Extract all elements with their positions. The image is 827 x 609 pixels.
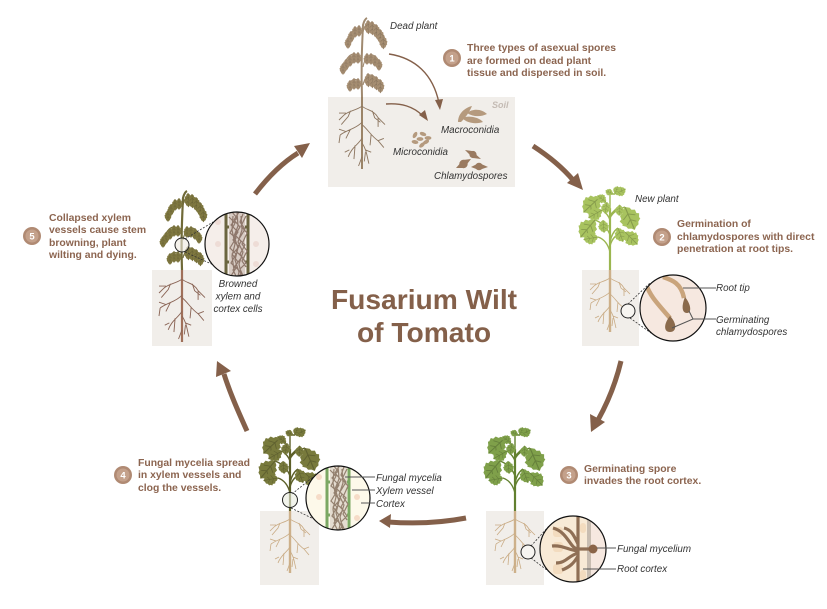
badge 2	[653, 228, 671, 246]
soil background 1	[328, 97, 515, 187]
step 3 text	[584, 464, 701, 487]
step 4 text: clog the vessels.	[138, 483, 221, 494]
microconidia label: Microconidia	[393, 147, 449, 158]
badge 1: 1	[449, 54, 455, 64]
badge 1	[443, 49, 461, 67]
zoom inset: root tip	[621, 275, 716, 341]
panel: step 1 dead plant and spores	[328, 18, 515, 187]
icon: microconidia	[411, 131, 431, 149]
germinating chlamydospores label: chlamydospores	[716, 327, 787, 338]
badge 3	[560, 466, 578, 484]
step 2 callout	[653, 219, 815, 255]
step 2 text: chlamydospores with direct	[677, 232, 815, 243]
arrow: step 3 to 4	[379, 514, 466, 528]
chlamydospores label: Chlamydospores	[434, 171, 508, 182]
step 5 text: wilting and dying.	[48, 250, 137, 261]
browned xylem label: xylem and	[215, 292, 261, 302]
badge 3: 3	[566, 470, 572, 482]
step 5 text: vessels cause stem	[49, 225, 146, 236]
olive plant	[253, 425, 324, 573]
soil background 2	[582, 270, 639, 346]
step 2 text	[677, 219, 815, 255]
macroconidia label: Macroconidia	[441, 125, 500, 136]
wilted plant	[159, 191, 208, 342]
zoom inset: fungal mycelia in xylem	[282, 465, 375, 533]
step 5 text: browning, plant	[49, 238, 127, 249]
step 1 text: are formed on dead plant	[467, 56, 592, 67]
panel: step 5 wilted plant	[152, 191, 269, 346]
step 2 text: Germination of	[677, 219, 751, 230]
step 5 text: Collapsed xylem	[49, 213, 131, 224]
step 3 text: Germinating spore	[584, 464, 677, 475]
arrow: step 5 to 1	[255, 143, 310, 194]
title: of Tomato	[357, 316, 491, 348]
badge 4: 4	[120, 470, 126, 482]
icon: macroconidia	[458, 106, 487, 123]
soil background 3	[486, 511, 544, 585]
arrow: dead plant to spores	[389, 54, 443, 110]
step 3 callout	[560, 464, 701, 487]
icon: chlamydospores	[456, 150, 488, 170]
fungal mycelia label: Fungal mycelia	[376, 473, 442, 484]
soil background 4	[260, 511, 319, 585]
soil label: Soil	[492, 100, 509, 110]
arrow: step 4 to 5	[216, 361, 247, 431]
step 1 text: tissue and dispersed in soil.	[467, 68, 606, 79]
panel: step 3 root cortex	[478, 425, 691, 585]
panel: step 4 xylem colonised	[253, 425, 442, 585]
cortex label: Cortex	[376, 499, 406, 510]
dead plant	[339, 18, 388, 169]
step 4 text	[138, 458, 250, 494]
step 4 text: in xylem vessels and	[138, 470, 241, 481]
soil background 5	[152, 270, 212, 346]
step 3 text: invades the root cortex.	[584, 476, 701, 487]
panel: step 2 new plant	[573, 184, 787, 346]
step 1 callout	[443, 43, 616, 79]
badge 5: 5	[29, 232, 35, 242]
arrow: step 2 to 3	[590, 361, 621, 432]
step 5 text	[48, 213, 146, 261]
healthy light plant	[573, 184, 644, 332]
root tip label: Root tip	[716, 283, 750, 294]
title	[331, 283, 518, 348]
fungal mycelium label: Fungal mycelium	[617, 544, 691, 555]
step 5 callout	[23, 213, 146, 261]
browned xylem label: Browned	[219, 279, 257, 290]
badge 2: 2	[659, 232, 665, 244]
healthy plant	[478, 425, 549, 573]
dead plant label: Dead plant	[390, 21, 439, 32]
arrow: root to spores	[386, 104, 428, 121]
arrow: step 1 to 2	[533, 146, 583, 190]
step 2 text: penetration at root tips.	[677, 244, 793, 255]
zoom inset: browned xylem	[175, 210, 269, 280]
step 1 text: Three types of asexual spores	[467, 43, 616, 54]
step 4 text: Fungal mycelia spread	[138, 458, 250, 469]
step 4 callout	[114, 458, 250, 494]
new plant label: New plant	[635, 194, 680, 205]
browned xylem label: cortex cells	[214, 304, 263, 315]
zoom inset: fungal mycelium	[521, 515, 616, 585]
root cortex label: Root cortex	[617, 564, 668, 575]
xylem vessel label: Xylem vessel	[375, 486, 435, 497]
step 1 text	[467, 43, 616, 79]
germinating chlamydospores label: Germinating	[716, 315, 769, 326]
title: Fusarium Wilt	[331, 283, 518, 315]
